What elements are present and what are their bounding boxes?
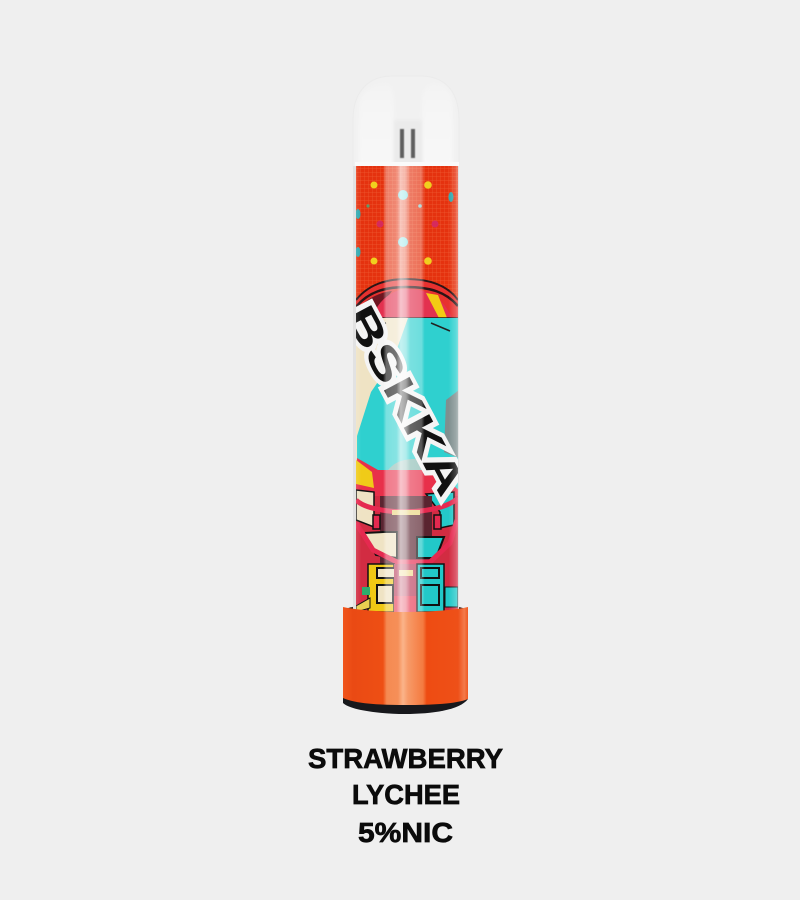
glass tube edge: [353, 166, 459, 616]
red dotted upper wrap: [355, 166, 459, 301]
dark inner collar: [344, 604, 466, 616]
product name and nicotine strength: [308, 743, 503, 848]
flavor line 2: LYCHEE: [352, 779, 460, 810]
cream and teal face: [355, 318, 459, 490]
red mask and yellow trim: [355, 458, 459, 618]
orange base: [343, 607, 468, 714]
infographic canvas: [308, 128, 504, 843]
product: disposable vape device: [343, 128, 468, 714]
robot jaw and teeth: [356, 496, 458, 618]
printed wrap artwork: [356, 166, 458, 612]
flavor line 1: STRAWBERRY: [308, 743, 503, 774]
nicotine strength: 5%NIC: [358, 817, 453, 848]
logo wordmark: BSKKA: [336, 297, 475, 503]
helmet dome: [356, 279, 458, 323]
glass sheen overlay: [355, 166, 459, 618]
clear mouthpiece cap: [353, 76, 459, 168]
